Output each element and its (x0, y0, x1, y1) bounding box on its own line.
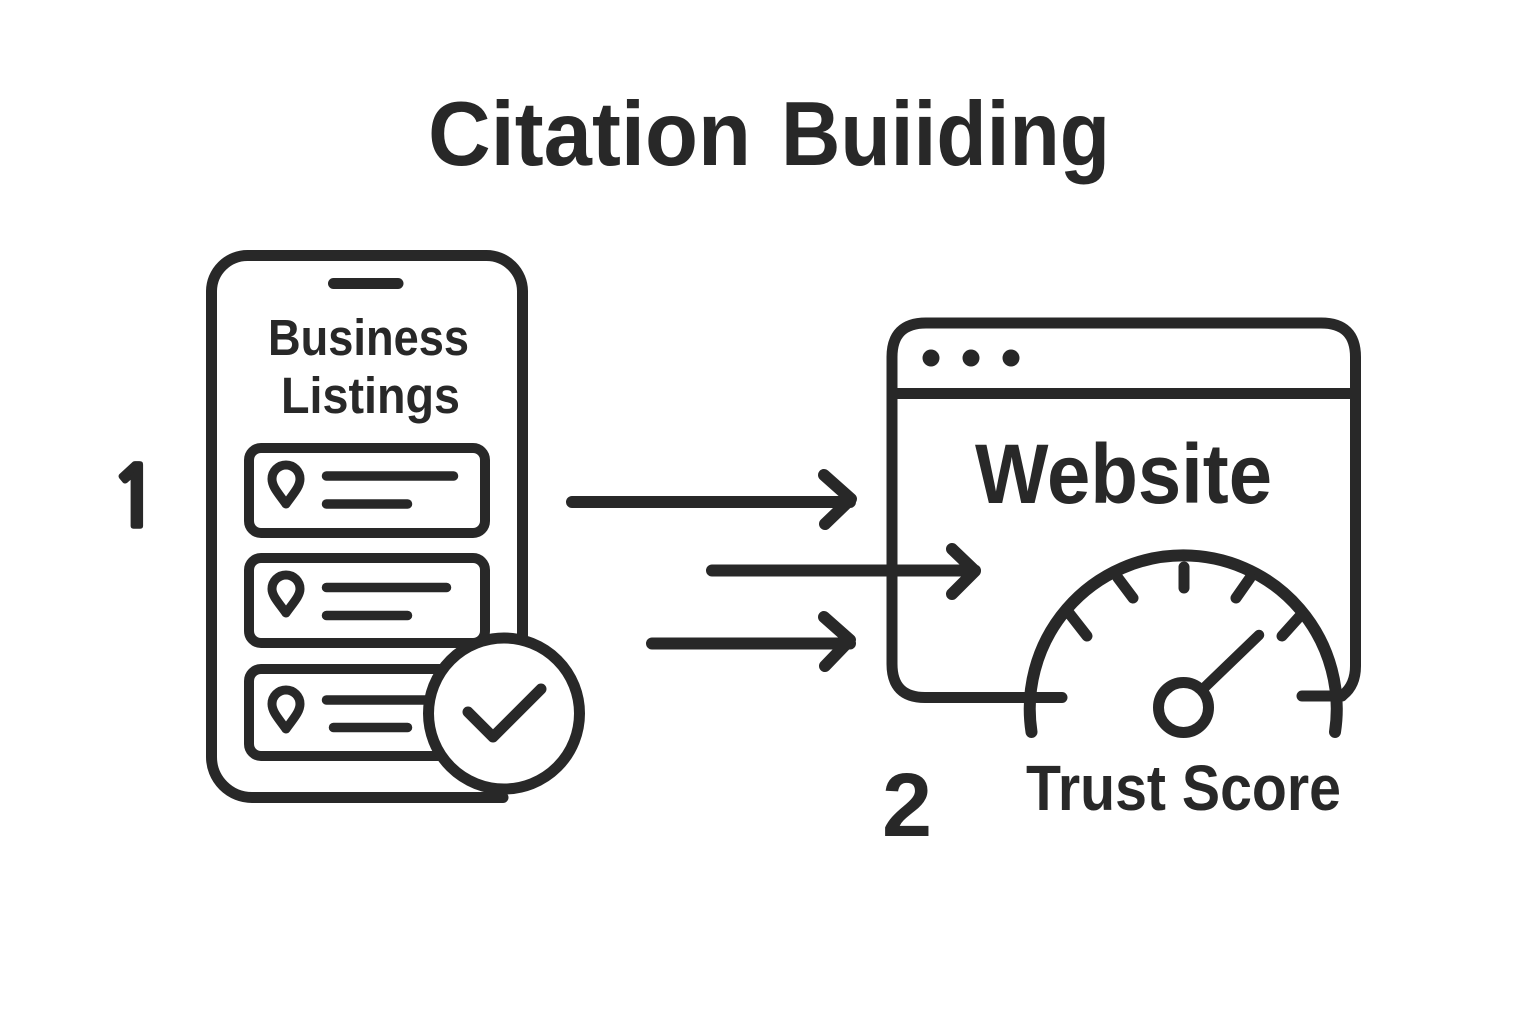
phone outline (212, 256, 522, 798)
title: Citation (428, 84, 751, 185)
panel: phone with business listings (212, 256, 580, 798)
browser outline (892, 323, 1356, 698)
listing card 1 (249, 448, 485, 533)
browser header divider (892, 388, 1355, 399)
number 2: 2 (882, 756, 932, 856)
number 1: 1 (110, 456, 160, 540)
gauge needle (1205, 635, 1259, 687)
gauge ticks (1069, 567, 1342, 696)
phone speaker (334, 278, 398, 289)
website heading: Website (975, 427, 1272, 521)
arrow bottom (652, 617, 850, 666)
title (428, 84, 1110, 185)
panel: browser window (892, 323, 1356, 698)
icon: check badge (428, 638, 580, 789)
listing card 3 (249, 669, 485, 756)
arrow top (572, 475, 851, 524)
phone heading: Listings (281, 367, 460, 424)
trust score label: Trust Score (1026, 752, 1341, 824)
phone heading: Business (268, 309, 469, 366)
listing card 2 (249, 558, 485, 643)
arrow middle (712, 549, 975, 594)
browser dots (922, 350, 1020, 366)
gauge hub (1158, 682, 1208, 732)
gauge: trust score (1026, 555, 1342, 824)
phone heading (268, 309, 469, 424)
gauge arc (1030, 555, 1337, 732)
title: Buiiding (781, 84, 1110, 185)
